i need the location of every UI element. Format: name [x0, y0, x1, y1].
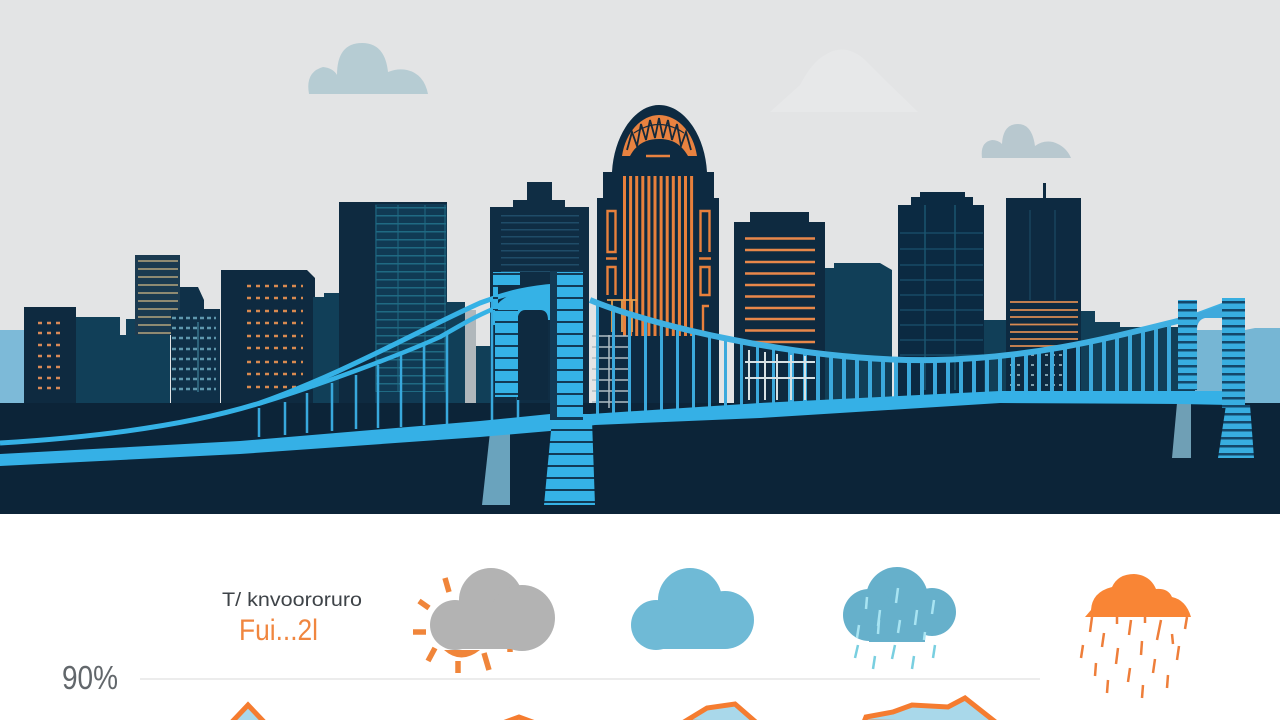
gridline — [140, 678, 1040, 680]
building: teal filler behind bridge — [447, 302, 465, 403]
building: teal filler right of pole — [476, 346, 493, 403]
building: teal block — [75, 317, 170, 403]
peak 2 — [500, 717, 538, 720]
bridge — [0, 286, 1230, 466]
rain streaks inside cloud — [857, 588, 934, 640]
building: teal filler — [313, 293, 340, 403]
right tower leg — [550, 270, 583, 420]
building: striped tower — [135, 255, 180, 339]
light background skyline: left — [0, 330, 24, 403]
building: tall glass tower — [339, 202, 447, 403]
orange cloud body — [1085, 574, 1191, 617]
building: teal mid block — [825, 263, 892, 403]
lower frame — [607, 300, 637, 332]
suspension cable: right — [590, 300, 1225, 360]
right tower lower pier — [1218, 405, 1254, 458]
peak 1 — [230, 705, 266, 720]
lower tower pier — [544, 420, 595, 505]
suspension cables: left — [0, 286, 556, 443]
small lights under antenna tower — [1010, 355, 1065, 385]
icon: rain cloud — [843, 567, 956, 669]
tower opening — [517, 310, 548, 400]
grey cloud — [430, 568, 555, 651]
building: window block — [171, 287, 220, 403]
grey tower pole — [465, 310, 476, 420]
right tower right leg — [1222, 298, 1245, 408]
buildings: far left group — [24, 255, 340, 403]
tower crossbeam — [493, 284, 556, 325]
cloud: upper right — [982, 124, 1071, 158]
icon: sun behind grey cloud — [413, 568, 555, 673]
icon: blue cloud — [631, 568, 754, 650]
ground — [0, 403, 1280, 514]
rain cloud body — [843, 567, 956, 642]
hangers: right span — [596, 306, 1171, 414]
building: blue grid tower — [898, 192, 984, 403]
light background skyline: right — [1195, 328, 1280, 403]
vertical orange stripes — [623, 176, 695, 336]
heading text: T/ knvoororuro — [222, 590, 362, 611]
sky background — [0, 0, 1280, 514]
peak 4 — [864, 698, 998, 720]
cloud: faint centre — [770, 50, 918, 112]
icon: orange rain cloud — [1081, 574, 1191, 698]
building: lit tower centre — [221, 270, 315, 403]
side frames right — [699, 211, 711, 335]
sun rays — [413, 578, 510, 673]
right tower arch — [1190, 304, 1225, 330]
left tower leg — [493, 272, 520, 397]
building: teal connector — [984, 320, 1006, 403]
dome ornament — [622, 115, 697, 156]
side frames left — [606, 211, 617, 295]
grey-blue pier: right — [1172, 403, 1191, 458]
lower panel background — [0, 514, 1280, 720]
grey-blue pier: main — [482, 432, 510, 505]
orange rain drops — [1081, 617, 1187, 698]
chart: area peaks — [230, 698, 998, 720]
white grid left of centre — [592, 335, 628, 408]
deck — [0, 391, 1230, 466]
building: lit tower left — [24, 307, 76, 403]
main bridge tower — [493, 270, 595, 505]
axis label: 90% — [62, 659, 118, 696]
cloud: upper left — [308, 43, 428, 94]
white grid under orange block — [745, 350, 815, 400]
building: antenna tower — [1006, 183, 1081, 403]
building: stepped tower — [490, 182, 589, 403]
hangers: left span — [259, 300, 518, 437]
right tower left leg — [1178, 300, 1197, 390]
sun arc — [444, 650, 480, 658]
peak 3 — [684, 704, 758, 720]
orange subheading: Fui...2l — [239, 614, 318, 647]
building: central domed tower — [597, 105, 719, 403]
building: orange striped block — [734, 212, 825, 403]
rain drops below cloud — [855, 645, 935, 669]
right bridge tower — [1178, 298, 1254, 458]
building: low right blocks — [1081, 311, 1195, 403]
building lights below the bridge — [592, 335, 1065, 408]
